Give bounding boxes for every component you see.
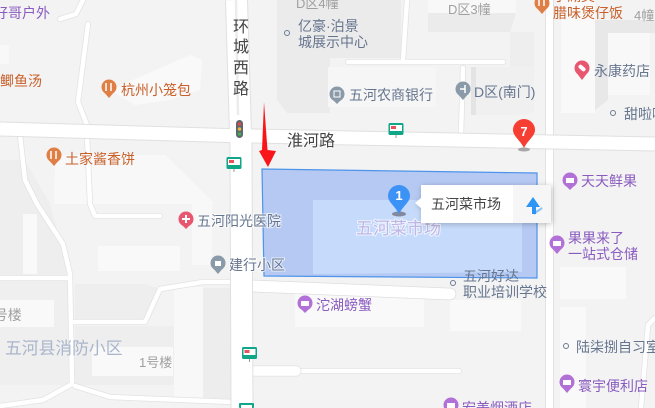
POI: 五河好达职业培训学校: 职业培训学校	[463, 284, 547, 300]
POI: 五河好达职业培训学校	[450, 268, 547, 300]
marker 1	[388, 185, 410, 216]
road label: 环城西路: 路	[233, 80, 249, 98]
bus stop icon	[239, 403, 254, 408]
POI: 天天鲜果: 天天鲜果	[581, 173, 637, 189]
district label: 五河县消防小区: 五河县消防小区	[5, 339, 122, 358]
bus stop icon	[242, 347, 257, 362]
road label: 环城西路: 环	[233, 19, 249, 36]
highlighted market area	[262, 169, 537, 278]
area label: 五河菜市场: 五河菜市场	[356, 219, 441, 238]
POI: 沱湖螃蟹: 沱湖螃蟹	[316, 297, 372, 313]
POI: 五河好达职业培训学校: 五河好达	[463, 268, 519, 284]
POI: 寰宇便利店	[560, 374, 648, 394]
POI: 鲫鱼汤: 鲫鱼汤	[0, 73, 42, 89]
POI: 建行小区	[210, 256, 285, 274]
POI: 甜啦啦	[610, 106, 655, 122]
POI: 土家酱香饼	[46, 148, 135, 167]
POI: D区(南门): D区(南门)	[474, 84, 535, 100]
grey labels: 4幢	[634, 8, 654, 23]
POI: 宏美烟酒店	[444, 398, 532, 408]
POI: 果果来了一站式仓储: 一站式仓储	[568, 246, 638, 262]
POI: 五河农商银行: 五河农商银行	[349, 87, 433, 103]
POI: 果果来了一站式仓储	[550, 230, 638, 262]
road label: 环城西路: 西	[233, 60, 249, 77]
popup: 五河菜市场: 五河菜市场	[431, 196, 501, 212]
marker 7	[513, 119, 535, 152]
POI: 寰宇便利店: 寰宇便利店	[578, 378, 648, 394]
marker 7: 7	[520, 124, 528, 139]
icon: navigation arrow	[526, 197, 542, 215]
POI: 土家酱香饼: 土家酱香饼	[65, 151, 135, 167]
bus stop icon	[388, 123, 404, 138]
POI: 腊味煲仔饭: 腊味煲仔饭	[553, 5, 623, 21]
red arrow	[259, 102, 276, 167]
POI: 建行小区: 建行小区	[229, 257, 285, 273]
POI: 杭州小笼包: 杭州小笼包	[121, 82, 191, 98]
marker 1: 1	[395, 188, 403, 203]
POI: D区(南门)	[456, 82, 535, 100]
POI: 永康药店: 永康药店	[594, 63, 650, 79]
POI: 天天鲜果	[562, 172, 637, 190]
POI: 腊味煲仔饭	[534, 0, 623, 21]
POI: 永康药店	[574, 60, 650, 80]
POI: 亿豪·泊景城展示中心: 亿豪·泊景	[298, 18, 359, 34]
POI: 亿豪·泊景城展示中心: 城展示中心	[298, 34, 368, 50]
road label: 环城西路: 城	[233, 38, 249, 56]
grey labels: 1号楼	[139, 355, 172, 370]
bus stop icon	[226, 157, 242, 172]
POI: 亿豪·泊景城展示中心	[284, 18, 368, 50]
POI: 杭州小笼包	[102, 80, 191, 98]
POI: 果果来了一站式仓储: 果果来了	[568, 230, 624, 246]
popup: 五河菜市场	[415, 185, 551, 223]
road label: 淮河路: 淮河路	[287, 132, 335, 150]
POI: 沱湖螃蟹	[298, 296, 372, 313]
grey labels: D区3幢	[448, 2, 491, 17]
POI: 五河阳光医院: 五河阳光医院	[197, 213, 281, 229]
traffic light icon	[236, 120, 243, 138]
road label: 环城西路	[233, 19, 249, 98]
